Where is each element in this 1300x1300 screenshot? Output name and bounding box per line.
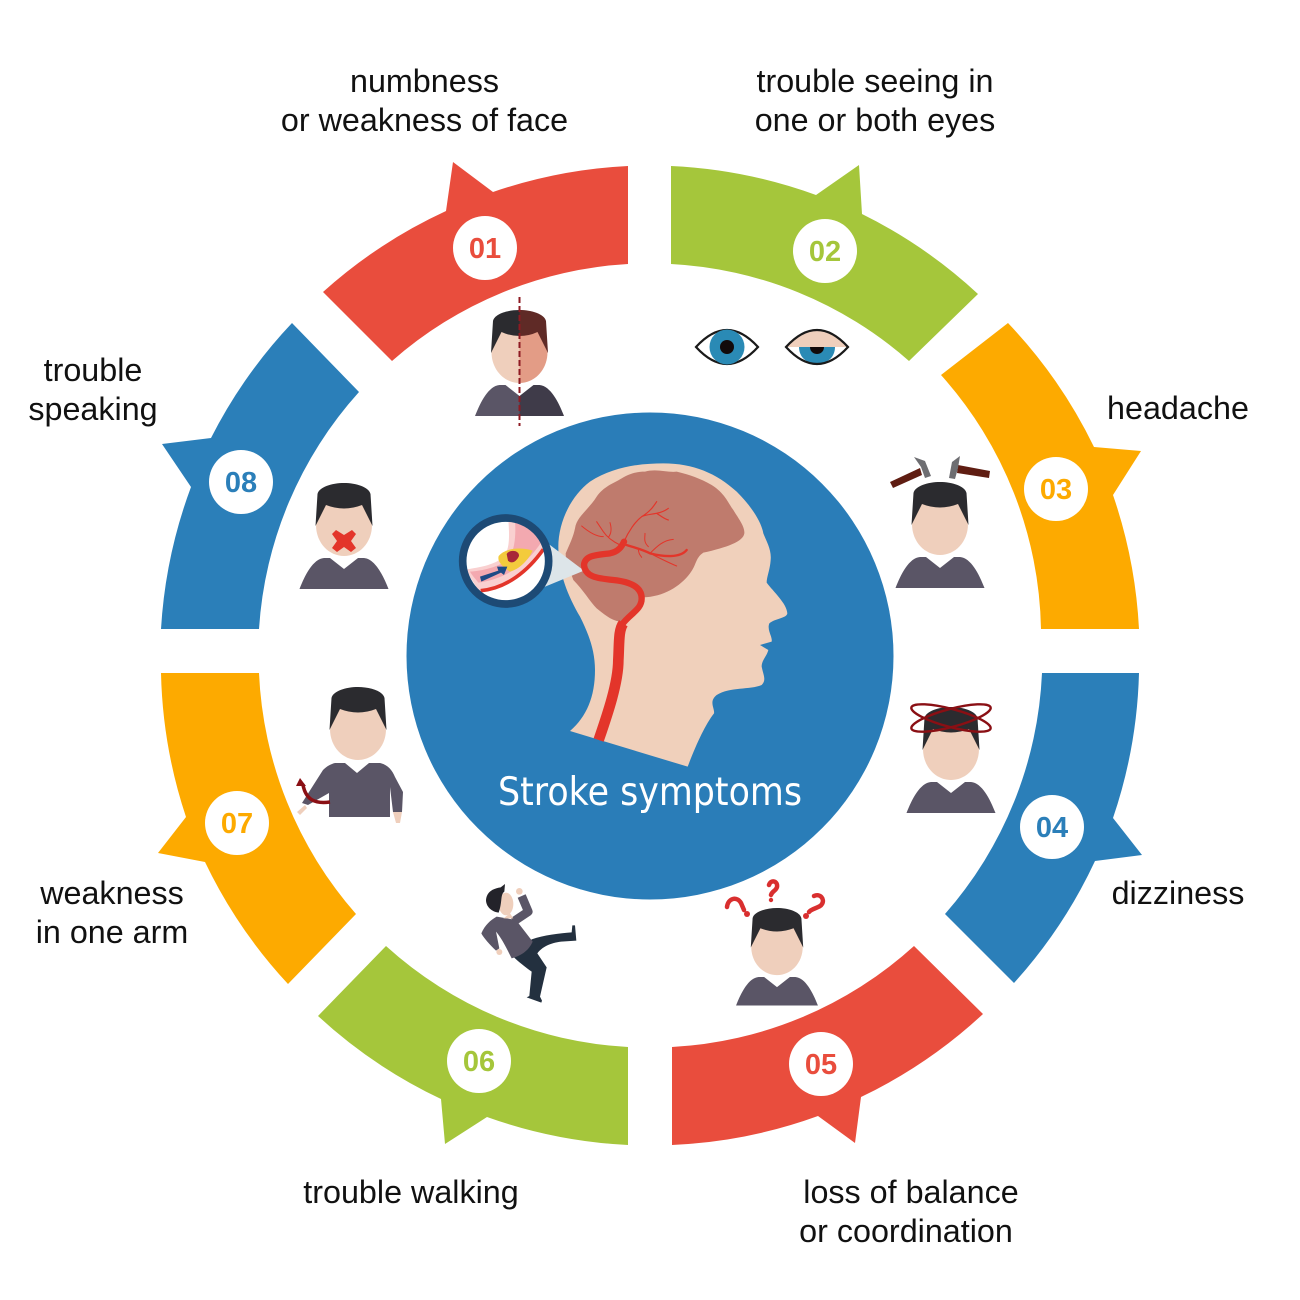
icon: drooping eye — [786, 330, 848, 364]
badge 04 — [1020, 795, 1084, 859]
badge 01 — [453, 216, 517, 280]
badge 05 — [789, 1032, 853, 1096]
magnifier wedge — [543, 540, 584, 587]
central circle panel — [406, 412, 894, 900]
badge 03 — [1024, 457, 1088, 521]
icon: person 06 falling man — [481, 884, 576, 1003]
segment 02 green — [671, 165, 978, 361]
central title: Stroke symptoms — [498, 770, 802, 815]
icon: person 07 weak arm — [296, 687, 403, 823]
badge 08: 08 — [225, 467, 257, 499]
badge 01: 01 — [469, 233, 501, 265]
segment 08 blue — [161, 323, 359, 629]
icon: normal eye — [696, 330, 758, 364]
head — [499, 893, 513, 915]
badge 07 — [205, 791, 269, 855]
label 05 loss of balance: loss of balance — [803, 1174, 1019, 1210]
label 01 numbness: or weakness of face — [281, 102, 568, 138]
badge 04: 04 — [1036, 812, 1068, 844]
legs — [514, 925, 576, 1003]
label 08 trouble speaking — [28, 352, 158, 427]
label 01 numbness: numbness — [350, 63, 499, 99]
red X over mouth — [332, 530, 356, 552]
segment 07 orange — [158, 673, 356, 984]
hammers — [890, 456, 990, 488]
magnifier inset — [463, 518, 549, 604]
icon: person 08 cannot speak — [300, 483, 388, 589]
label 04 dizziness: dizziness — [1112, 875, 1244, 911]
icon: person 04 dizziness — [906, 699, 996, 813]
badge 03: 03 — [1040, 474, 1072, 506]
label 06 trouble walking: trouble walking — [303, 1174, 519, 1210]
icon: person 05 confusion — [727, 881, 823, 1006]
label 07 weakness in one arm — [36, 875, 188, 950]
label 08 trouble speaking: trouble — [44, 352, 142, 388]
badge 02: 02 — [809, 236, 841, 268]
label 03 headache: headache — [1107, 390, 1249, 426]
label 02 trouble seeing: trouble seeing in — [756, 63, 994, 99]
badge 07: 07 — [221, 808, 253, 840]
segment 04 blue — [945, 673, 1142, 983]
downward arrow — [301, 783, 330, 802]
label 02 trouble seeing — [755, 63, 995, 138]
segment 03 orange — [941, 323, 1141, 629]
badge 06: 06 — [463, 1046, 495, 1078]
label 08 trouble speaking: speaking — [28, 391, 158, 427]
label 05 loss of balance: or coordination — [799, 1213, 1013, 1249]
segment 01 red — [323, 162, 628, 361]
dizzy orbits — [909, 699, 993, 737]
torso and arms — [481, 917, 533, 958]
icon: person 01 half-numb face — [475, 297, 564, 426]
question marks — [727, 881, 823, 912]
label 07 weakness in one arm: in one arm — [36, 914, 188, 950]
label 02 trouble seeing: one or both eyes — [755, 102, 995, 138]
hands — [516, 888, 523, 895]
badge 05: 05 — [805, 1049, 837, 1081]
segment 06 green — [318, 946, 628, 1145]
badge 02 — [793, 219, 857, 283]
badge 08 — [209, 450, 273, 514]
segment 05 red — [672, 946, 983, 1145]
label 05 loss of balance — [799, 1174, 1019, 1249]
icon: person 03 headache — [890, 456, 990, 588]
badge 06 — [447, 1029, 511, 1093]
label 01 numbness — [281, 63, 568, 138]
brain — [566, 470, 744, 622]
artery — [582, 502, 687, 740]
label 07 weakness in one arm: weakness — [39, 875, 184, 911]
head profile with brain — [463, 463, 787, 767]
